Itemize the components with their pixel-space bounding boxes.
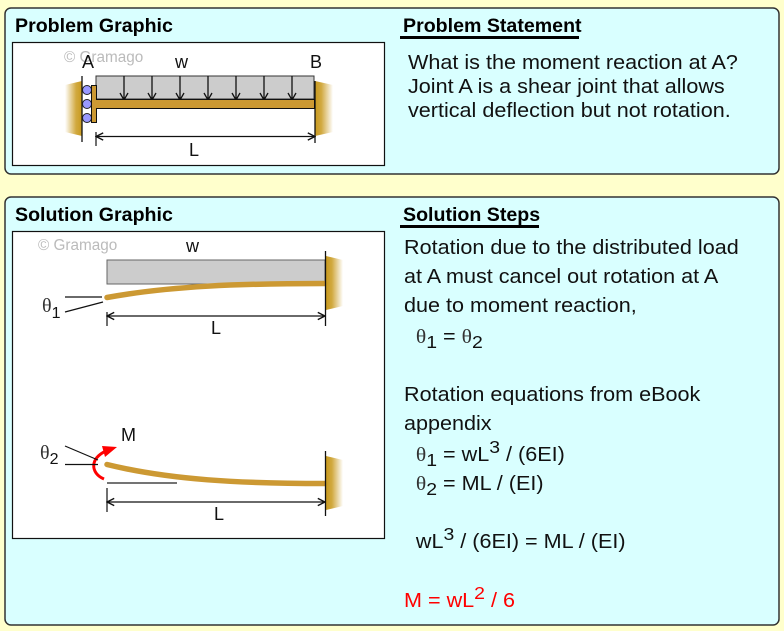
right wall bbox=[315, 81, 333, 143]
answer: / 6 bbox=[485, 590, 515, 612]
equation: combined: wL bbox=[416, 531, 443, 553]
moment arrow M bbox=[94, 425, 136, 479]
solution steps text: due to moment reaction, bbox=[404, 295, 637, 317]
equation: theta 2: θ bbox=[416, 472, 426, 495]
equation: theta equality: 1 bbox=[426, 332, 437, 352]
label A: A bbox=[82, 52, 94, 72]
watermark: © Gramago bbox=[38, 237, 117, 254]
equation: combined: / (6EI) = ML / (EI) bbox=[454, 531, 626, 553]
moment arrow M: M bbox=[121, 425, 136, 445]
theta 2 angle bbox=[40, 442, 98, 468]
heading: solution steps: Solution Steps bbox=[403, 204, 540, 226]
equation: theta 1: / (6EI) bbox=[500, 444, 565, 466]
panel: solution bbox=[5, 197, 779, 625]
problem statement text: vertical deflection but not rotation. bbox=[408, 100, 731, 122]
solution graphic diagram bbox=[12, 232, 384, 538]
label w: w bbox=[174, 52, 189, 72]
label L: L bbox=[214, 504, 224, 524]
equation: theta equality: θ bbox=[462, 325, 472, 348]
equation: theta 1: = wL bbox=[437, 444, 489, 466]
panel: problem bbox=[5, 8, 779, 174]
top wall bbox=[326, 251, 343, 326]
equation: theta 1: θ bbox=[416, 443, 426, 466]
watermark: © Gramago bbox=[64, 49, 143, 66]
equation: theta 1: 1 bbox=[426, 450, 437, 470]
heading: solution graphic: Solution Graphic bbox=[15, 204, 173, 226]
theta 1 angle: θ bbox=[42, 295, 52, 317]
bottom reference line bbox=[107, 482, 177, 484]
heading: problem graphic: Problem Graphic bbox=[15, 15, 173, 37]
dimension L bbox=[96, 132, 315, 146]
equation: combined: 3 bbox=[443, 524, 454, 544]
bottom dimension L bbox=[107, 488, 325, 512]
beam with shear plate bbox=[92, 86, 314, 122]
equation: theta equality: θ bbox=[416, 325, 426, 348]
label L: L bbox=[211, 318, 221, 338]
label w: w bbox=[185, 236, 200, 256]
equation: theta 1: 3 bbox=[489, 437, 500, 457]
problem statement text: What is the moment reaction at A? bbox=[408, 52, 738, 74]
solution steps text: Rotation due to the distributed load bbox=[404, 237, 739, 259]
distributed load w bbox=[96, 76, 314, 100]
label L: L bbox=[189, 140, 199, 160]
problem statement text: Joint A is a shear joint that allows bbox=[408, 76, 725, 98]
problem graphic diagram bbox=[12, 42, 384, 166]
solution steps text: appendix bbox=[404, 413, 492, 435]
top deflected beam bbox=[107, 284, 325, 298]
heading: problem statement: Problem Statement bbox=[403, 15, 582, 37]
bottom deflected beam bbox=[107, 464, 325, 484]
equation: theta equality: = bbox=[437, 326, 462, 348]
solution steps text: at A must cancel out rotation at A bbox=[404, 266, 718, 288]
solution steps text: Rotation equations from eBook bbox=[404, 384, 701, 406]
label B: B bbox=[310, 52, 322, 72]
top load block bbox=[107, 260, 325, 284]
theta 2 angle: θ bbox=[40, 442, 50, 464]
equation: theta 2: = ML / (EI) bbox=[437, 473, 544, 495]
top dimension L bbox=[107, 312, 325, 326]
bottom wall bbox=[326, 451, 343, 516]
theta 2 angle: 2 bbox=[50, 451, 59, 468]
problem statement text bbox=[408, 52, 738, 122]
theta 1 angle bbox=[42, 295, 103, 322]
answer: 2 bbox=[474, 583, 485, 603]
equation: theta equality: 2 bbox=[472, 332, 483, 352]
solution steps text bbox=[404, 237, 739, 612]
equation: theta 2: 2 bbox=[426, 479, 437, 499]
rollers bbox=[82, 86, 92, 122]
left wall bbox=[65, 76, 82, 142]
theta 1 angle: 1 bbox=[52, 305, 61, 322]
answer: M = wL bbox=[404, 590, 474, 612]
